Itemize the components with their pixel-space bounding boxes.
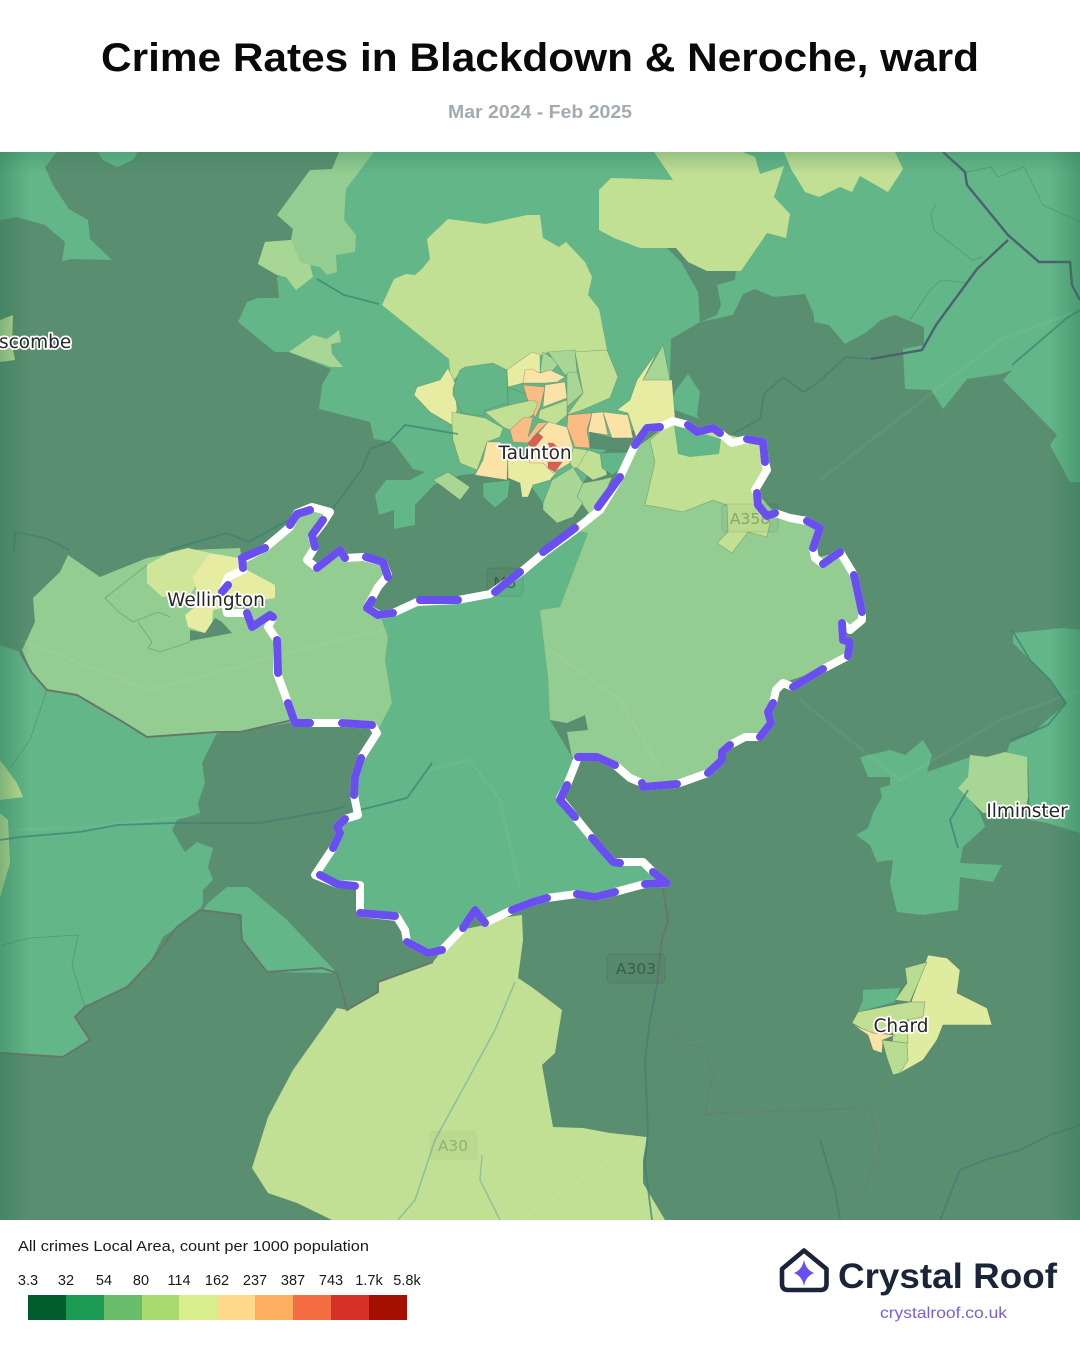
region: Ilminster wards (856, 628, 1080, 915)
ward fill: western Wellington ward (22, 507, 392, 737)
region: southern lime ward (252, 915, 665, 1220)
region: north-east wards (382, 152, 1080, 482)
brand logo (782, 1250, 1057, 1322)
legend scale labels: 114 (167, 1273, 191, 1289)
Wellington town wards (105, 548, 275, 652)
map edge vignette (0, 152, 1080, 1220)
legend scale labels: 743 (319, 1273, 343, 1289)
ward fill: north-east lime section (645, 421, 770, 553)
legend colour bar (28, 1295, 407, 1320)
legend title: All crimes Local Area, count per 1000 population (18, 1238, 369, 1255)
subtitle: date range: Mar 2024 - Feb 2025 (448, 102, 632, 122)
region: Chard wards (852, 955, 992, 1075)
legend scale labels: 32 (58, 1273, 74, 1289)
legend scale labels: 387 (281, 1273, 305, 1289)
legend scale labels: 5.8k (393, 1273, 421, 1289)
roads and thin ward boundaries (2, 166, 1080, 1006)
choropleth map (0, 152, 1080, 1220)
legend (18, 1238, 421, 1320)
title: Crime Rates in Blackdown & Neroche, ward (101, 36, 979, 80)
place label: Ilminster: Ilminster (986, 801, 1068, 822)
place label: Chard: Chard (873, 1016, 929, 1037)
region: north-west wards (0, 152, 700, 529)
place label: Wellington: Wellington (167, 590, 265, 611)
road label: A358 (722, 504, 778, 532)
region: south-west wards (0, 645, 337, 1057)
Taunton town wards (414, 345, 675, 523)
road label: A358: A358 (730, 510, 770, 528)
icon: house with star (782, 1250, 826, 1290)
road label: A30: A30 (438, 1137, 468, 1155)
legend scale labels: 54 (96, 1273, 112, 1289)
legend scale labels: 3.3 (18, 1273, 38, 1289)
road label: M5 (487, 568, 523, 596)
place label: Taunton: Taunton (497, 443, 572, 464)
brand url: crystalroof.co.uk (880, 1305, 1008, 1322)
legend scale labels: 1.7k (355, 1273, 383, 1289)
legend scale labels: 80 (133, 1273, 149, 1289)
rivers and administrative boundaries (0, 152, 1080, 1220)
legend scale labels (18, 1273, 421, 1289)
legend scale labels: 237 (243, 1273, 267, 1289)
road label: A303: A303 (616, 960, 656, 978)
ward fill: eastern Blackdown ward (540, 421, 862, 785)
ward fill: central Neroche ward (315, 530, 667, 953)
road label: A30 (430, 1131, 477, 1160)
legend scale labels: 162 (205, 1273, 229, 1289)
place label: scombe: scombe (0, 332, 71, 353)
ward boundary: white line with purple dashes (222, 421, 862, 953)
brand name: Crystal Roof (838, 1257, 1057, 1296)
road label: A303 (607, 954, 665, 983)
road label: M5: M5 (493, 574, 517, 592)
